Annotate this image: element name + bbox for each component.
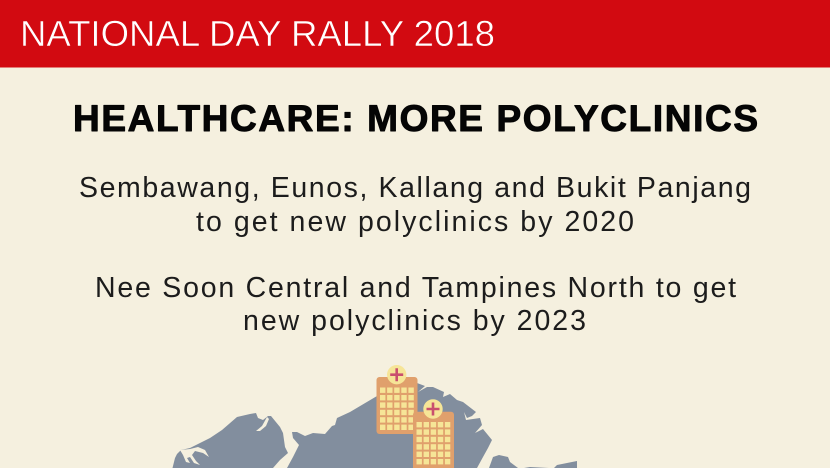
text block: polyclinics by 2020 bbox=[79, 172, 751, 238]
main heading: HEALTHCARE: MORE POLYCLINICS bbox=[73, 98, 758, 139]
header title: NATIONAL DAY RALLY 2018 bbox=[20, 13, 495, 54]
text block: polyclinics by 2023: new polyclinics by 2023 bbox=[243, 305, 586, 337]
map of Singapore bbox=[172, 383, 577, 468]
map inlet bbox=[256, 417, 269, 431]
icon: polyclinic building 2 bbox=[413, 399, 454, 468]
map inlet bbox=[180, 447, 209, 465]
header band bbox=[0, 0, 830, 68]
icon: polyclinic building 1 bbox=[376, 365, 418, 434]
text block: polyclinics by 2020: Sembawang, Eunos, Kallang and Bukit Panjang bbox=[79, 172, 751, 204]
text block: polyclinics by 2020: to get new polyclinics by 2020 bbox=[196, 206, 634, 238]
text block: polyclinics by 2023 bbox=[95, 272, 736, 337]
text block: polyclinics by 2023: Nee Soon Central and Tampines North to get bbox=[95, 272, 736, 304]
